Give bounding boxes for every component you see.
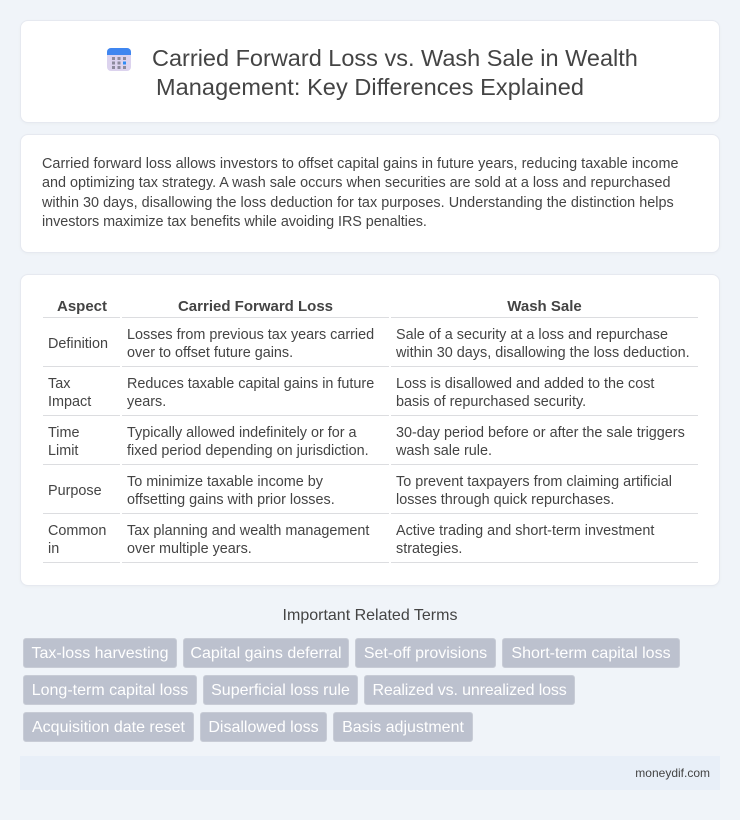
row: common in: Active trading and short-term investment bbox=[396, 523, 654, 539]
row: tax impact: years. bbox=[127, 394, 166, 410]
row: purpose: offsetting gains with prior losses. bbox=[127, 492, 335, 508]
table header bbox=[57, 298, 582, 315]
table header: Carried Forward Loss bbox=[178, 298, 333, 315]
row: purpose: Purpose bbox=[48, 483, 102, 499]
intro paragraph bbox=[42, 156, 679, 230]
row: definition: over to offset future gains. bbox=[127, 345, 293, 361]
related terms tags: Long-term capital loss bbox=[32, 682, 188, 699]
row: time limit: 30-day period before or after the sale triggers bbox=[396, 425, 685, 441]
row: time limit: fixed period depending on jurisdiction. bbox=[127, 443, 369, 459]
row: purpose: losses through quick repurchases. bbox=[396, 492, 614, 508]
footer source: moneydif.com bbox=[635, 766, 710, 780]
related terms tags: Tax-loss harvesting bbox=[32, 645, 168, 662]
intro paragraph: within 30 days, disallowing the loss deduction for tax purposes. Understanding the distinction helps bbox=[42, 195, 674, 211]
title bbox=[152, 45, 638, 100]
related terms tags bbox=[23, 638, 680, 742]
related terms tags: Short-term capital loss bbox=[511, 645, 671, 662]
row: definition: Definition bbox=[48, 336, 108, 352]
title: Management: Key Differences Explained bbox=[156, 74, 584, 100]
row: definition: Losses from previous tax years carried bbox=[127, 327, 374, 343]
title: Carried Forward Loss vs. Wash Sale in Wealth bbox=[152, 45, 638, 71]
row: time limit bbox=[48, 425, 685, 459]
row: common in: Tax planning and wealth management bbox=[127, 523, 369, 539]
related terms heading: Important Related Terms bbox=[283, 607, 457, 624]
row: tax impact: basis of repurchased security. bbox=[396, 394, 586, 410]
row: purpose: To minimize taxable income by bbox=[127, 474, 323, 490]
related terms tags: Realized vs. unrealized loss bbox=[372, 682, 567, 699]
row: common in: Common bbox=[48, 523, 106, 539]
related terms tags: Disallowed loss bbox=[208, 719, 319, 736]
intro paragraph: Carried forward loss allows investors to offset capital gains in future years, reducing taxable income bbox=[42, 156, 679, 172]
row: time limit: wash sale rule. bbox=[396, 443, 492, 459]
related terms tags: Acquisition date reset bbox=[32, 719, 185, 736]
row: time limit: Typically allowed indefinitely or for a bbox=[127, 425, 357, 441]
row: definition: Sale of a security at a loss and repurchase bbox=[396, 327, 668, 343]
row: tax impact: Loss is disallowed and added to the cost bbox=[396, 376, 654, 392]
row: definition bbox=[48, 327, 690, 361]
row: tax impact: Tax bbox=[48, 376, 70, 392]
related terms tags: Capital gains deferral bbox=[190, 645, 342, 662]
intro paragraph: and optimizing tax strategy. A wash sale occurs when securities are sold at a loss and repurchased bbox=[42, 175, 670, 191]
table header: Wash Sale bbox=[507, 298, 582, 315]
row: tax impact: Impact bbox=[48, 394, 91, 410]
footer bar bbox=[20, 756, 720, 790]
row: common in bbox=[48, 523, 654, 557]
intro text card bbox=[20, 134, 720, 253]
icon: calendar bbox=[107, 48, 131, 71]
row: common in: strategies. bbox=[396, 541, 462, 557]
table header: Aspect bbox=[57, 298, 107, 315]
related terms tags: Basis adjustment bbox=[342, 719, 464, 736]
header card bbox=[20, 20, 720, 123]
row: purpose bbox=[48, 474, 672, 508]
row: tax impact: Reduces taxable capital gains in future bbox=[127, 376, 374, 392]
row: common in: in bbox=[48, 541, 59, 557]
row: tax impact bbox=[48, 376, 654, 410]
row: time limit: Limit bbox=[48, 443, 78, 459]
row: common in: over multiple years. bbox=[127, 541, 252, 557]
related terms tags: Superficial loss rule bbox=[211, 682, 350, 699]
row: time limit: Time bbox=[48, 425, 79, 441]
row: definition: within 30 days, disallowing the loss deduction. bbox=[396, 345, 690, 361]
related terms tags: Set-off provisions bbox=[364, 645, 487, 662]
intro paragraph: investors maximize tax benefits while avoiding IRS penalties. bbox=[42, 214, 427, 230]
row: purpose: To prevent taxpayers from claiming artificial bbox=[396, 474, 672, 490]
comparison table card bbox=[20, 274, 720, 586]
